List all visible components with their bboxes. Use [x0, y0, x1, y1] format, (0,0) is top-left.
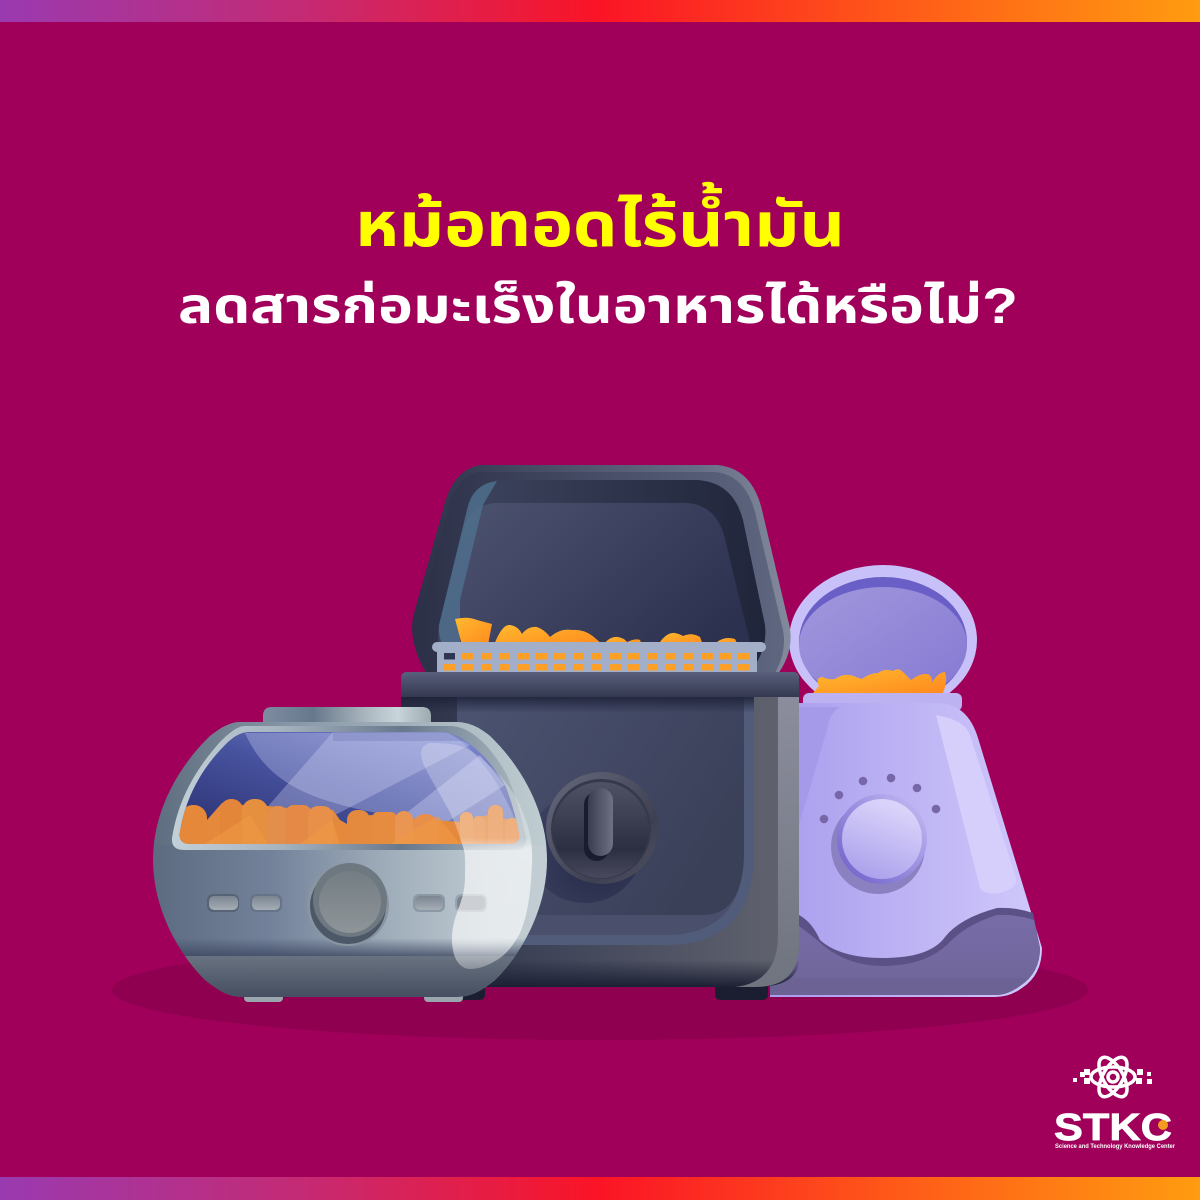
title: หม้อทอดไร้น้ำมัน: [355, 181, 845, 260]
logo orange dot: [1158, 1120, 1168, 1130]
purple dial: [831, 794, 927, 894]
silver cap: [263, 707, 431, 724]
bottom gradient bar: [0, 1177, 1200, 1200]
purple dial dots: [820, 774, 940, 823]
purple body: [770, 703, 1042, 997]
dark fryer body: [401, 690, 799, 987]
glass reflections: [245, 732, 518, 828]
logo: STKC: [1054, 1053, 1176, 1150]
logo atom icon: [1091, 1053, 1135, 1101]
silver knob: [307, 863, 389, 946]
silver window frame: [172, 726, 526, 850]
illustration: purple air fryer: [770, 565, 1042, 997]
dark fryer bottom shade: [401, 960, 799, 987]
silver feet: [244, 990, 463, 1002]
dark lid: [412, 465, 791, 680]
purple highlight strip: [936, 715, 1016, 893]
illustration: dark air fryer: [401, 465, 799, 1000]
purple collar: [803, 693, 962, 711]
purple body left facet: [799, 707, 840, 825]
purple lid: [789, 565, 977, 715]
silver window glass: [180, 732, 519, 844]
dark basket food: [455, 618, 738, 645]
logo tagline: Science and Technology Knowledge Center: [1055, 1144, 1176, 1150]
silver fryer food: [180, 799, 519, 844]
purple base wave: [770, 906, 1040, 995]
silver glossy highlight: [421, 743, 532, 969]
dark basket: [432, 642, 766, 672]
dark fryer rim: [401, 672, 799, 697]
logo pixel squares: [1073, 1069, 1152, 1084]
ground shadow: [112, 940, 1088, 1040]
dark fryer front panel: [401, 697, 754, 945]
dark fryer edge: [735, 697, 799, 987]
silver buttons: [207, 894, 487, 912]
basket holes: [444, 653, 749, 670]
dark fryer feet: [440, 975, 768, 1000]
silver body: [153, 722, 547, 997]
top gradient bar: [0, 0, 1200, 22]
logo wordmark: STKC: [1054, 1107, 1172, 1149]
silver shell shading: [150, 720, 550, 998]
subtitle: ลดสารก่อมะเร็งในอาหารได้หรือไม่?: [178, 278, 1018, 334]
dark fryer dial: [528, 772, 658, 903]
lid blue reflection: [439, 481, 497, 650]
illustration: silver air fryer: [150, 707, 550, 1002]
purple fryer food: [813, 669, 946, 693]
